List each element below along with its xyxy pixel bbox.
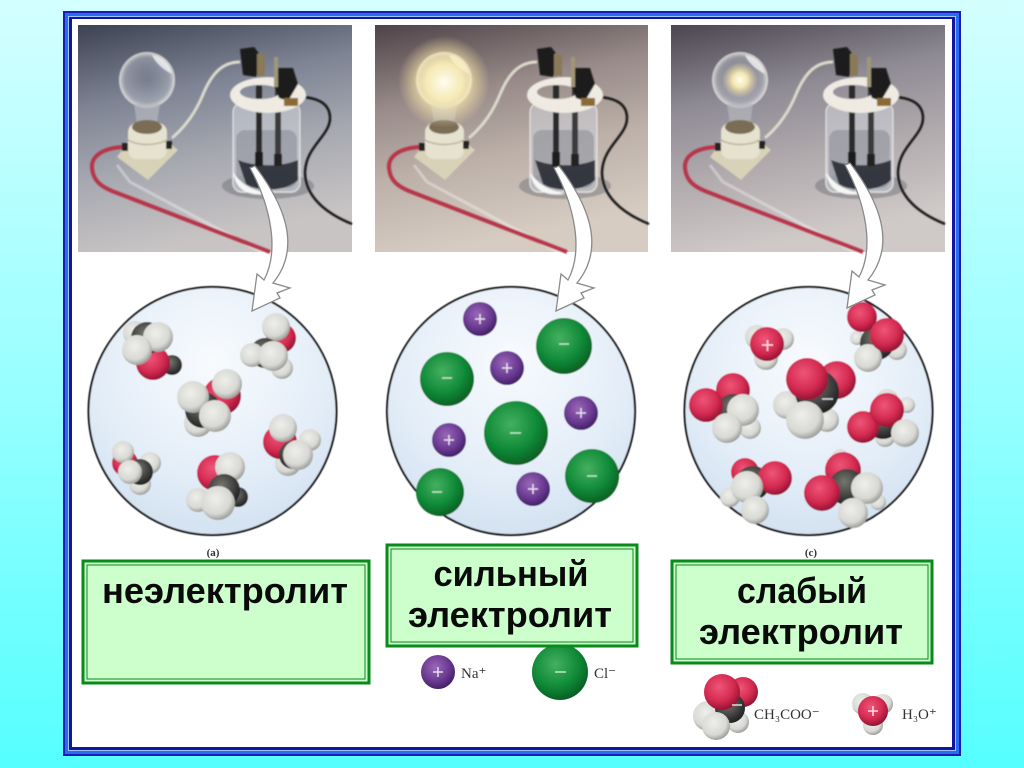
legend: hydronium ion: H₃O⁺: [902, 707, 937, 723]
label box: non-electrolyte: [83, 561, 369, 683]
legend: Cl- ion: [532, 644, 616, 700]
acetic acid, bottom right: [804, 449, 886, 528]
label box: weak electrolyte: электролит: [699, 611, 903, 652]
legend: hydronium ion: [852, 693, 937, 735]
acetic acid, top right: [847, 302, 907, 372]
molecule 4: [112, 441, 161, 495]
acetic acid, right: [847, 389, 919, 447]
chloride ions: [416, 318, 619, 516]
arrow: jar to weak electrolyte circle: [845, 163, 885, 308]
molecule 2: [240, 313, 296, 379]
label box: non-electrolyte: неэлектролит: [102, 570, 348, 611]
photo: non-electrolyte circuit, unlit bulb: [78, 25, 352, 254]
arrow: jar to non-electrolyte circle: [250, 166, 290, 311]
legend: Na+ ion: [421, 655, 486, 689]
caption (c): (c): [805, 547, 817, 559]
molecule 3: [177, 369, 242, 437]
acetic acid, left: [689, 373, 761, 443]
acetic acid, bottom left: [720, 458, 792, 524]
circle: non-electrolyte molecules: [88, 287, 336, 535]
circle: weak electrolyte molecules and ions: [684, 287, 932, 535]
label box: weak electrolyte: слабый: [737, 570, 867, 611]
acetate ion, centre: [773, 358, 856, 439]
photo: strong electrolyte circuit, bright bulb: [375, 25, 649, 254]
molecule 5: [186, 452, 248, 520]
label box: strong electrolyte: [387, 545, 637, 646]
caption (a): (a): [207, 547, 220, 559]
legend: acetate ion: CH₃COO⁻: [754, 707, 820, 723]
molecule 1: [122, 321, 182, 380]
sodium ions: [432, 302, 598, 506]
arrow: jar to strong electrolyte circle: [554, 166, 594, 311]
hydronium ion: [745, 325, 794, 370]
label box: strong electrolyte: электролит: [408, 594, 612, 635]
molecule 6: [263, 414, 321, 476]
legend: Na+ ion: Na⁺: [461, 666, 486, 682]
label box: weak electrolyte: [672, 561, 932, 663]
legend: Cl- ion: Cl⁻: [594, 666, 616, 682]
label box: strong electrolyte: сильный: [434, 553, 588, 594]
photo: weak electrolyte circuit, dim bulb: [671, 25, 945, 254]
circle: strong electrolyte ions: [387, 287, 635, 535]
legend: acetate ion: [693, 674, 820, 740]
